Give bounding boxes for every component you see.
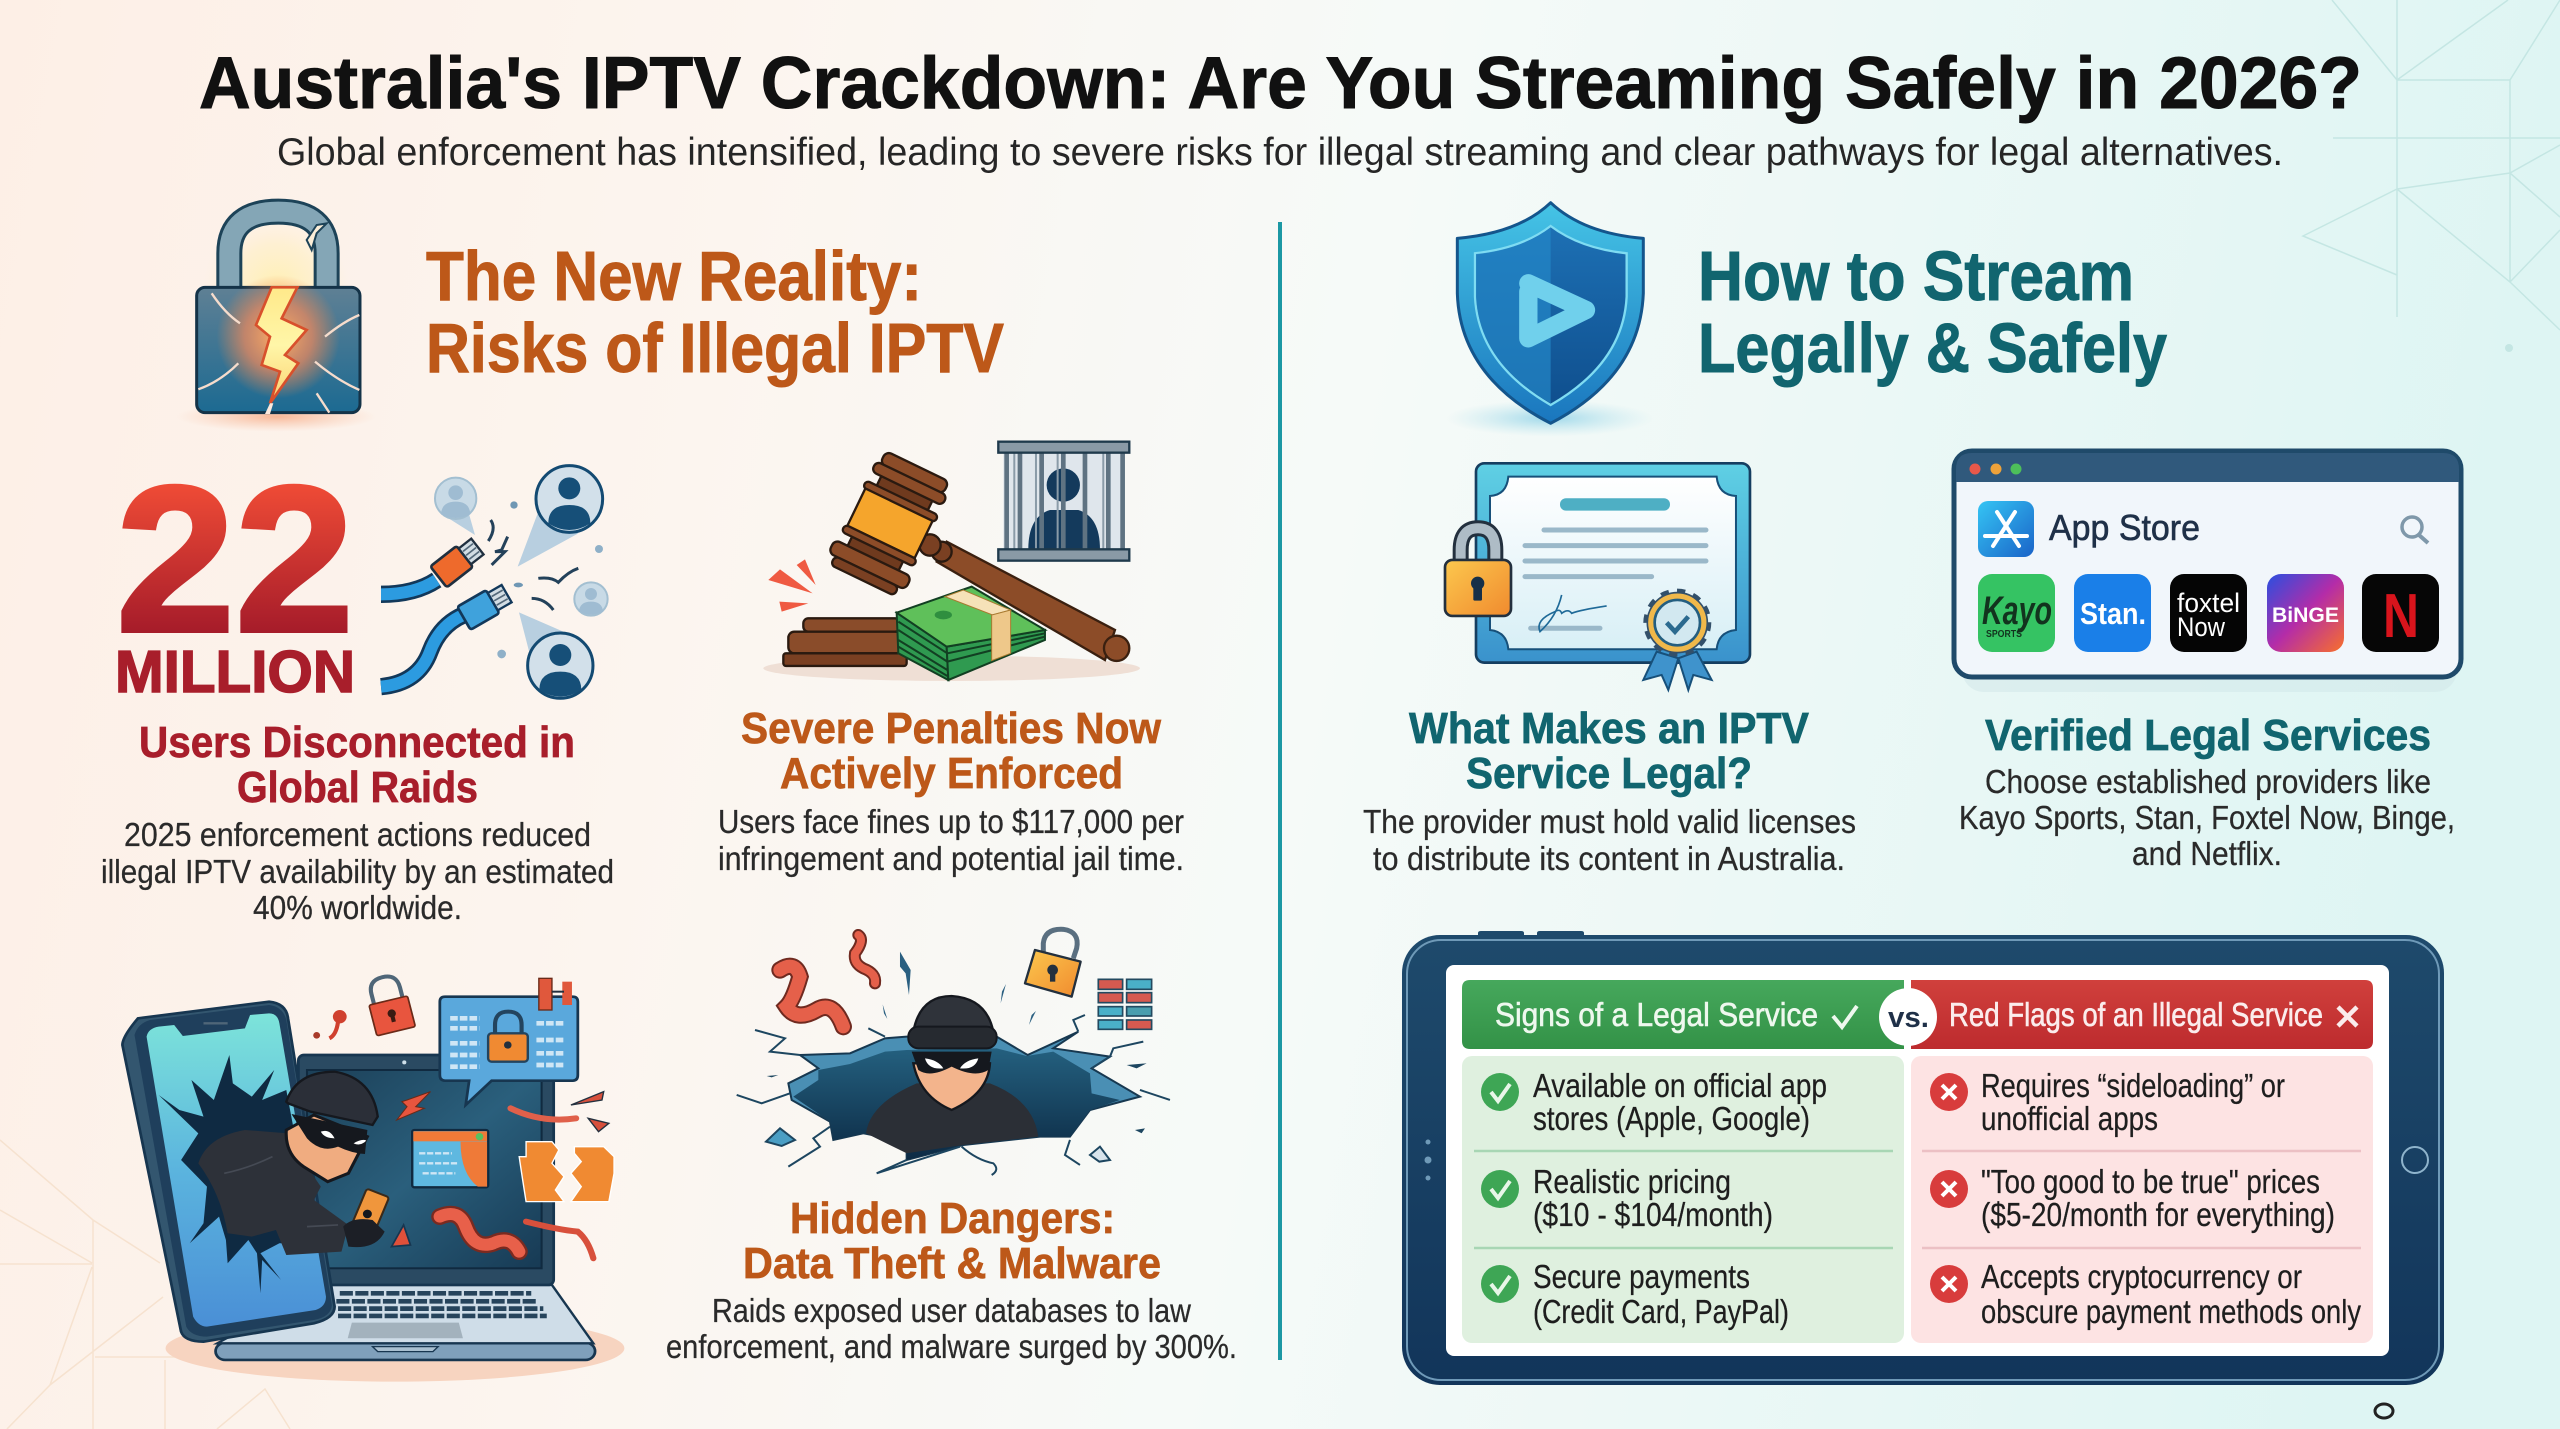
panel: legal signs: (Credit Card, PayPal) [1533, 1293, 1789, 1330]
vs badge: vs. [1888, 1002, 1929, 1034]
heading: users disconnected: Users Disconnected in [139, 718, 575, 767]
text: penalties body: infringement and potential jail time. [718, 840, 1184, 877]
panel: red flags [1911, 980, 2373, 1343]
heading: severe penalties: Actively Enforced [780, 749, 1123, 798]
icon: cut cables and users [381, 466, 608, 698]
text: verified body: Kayo Sports, Stan, Foxtel Now, Binge, [1959, 799, 2455, 836]
text: dangers body: Raids exposed user databases to law [712, 1292, 1191, 1329]
text: disconnected body: 2025 enforcement actions reduced [124, 816, 591, 853]
panel: legal signs: Signs of a Legal Service [1495, 996, 1818, 1033]
icon: app store window: Kayo [1982, 589, 2052, 633]
panel: red flags: Accepts cryptocurrency or [1981, 1258, 2302, 1295]
text: dangers body: enforcement, and malware surged by 300%. [666, 1328, 1237, 1365]
icon: play shield [1447, 203, 1653, 437]
heading: users disconnected: Global Raids [237, 763, 478, 812]
heading: how to stream: How to Stream [1698, 237, 2134, 315]
heading: new reality [426, 237, 1004, 387]
comparison tablet [1402, 931, 2444, 1385]
icon: app store window: App Store [2049, 507, 2200, 548]
stat: 22 million: 22 [116, 444, 354, 676]
heading: users disconnected [139, 718, 575, 812]
heading: hidden dangers: Data Theft & Malware [743, 1239, 1161, 1288]
heading: what makes legal [1409, 704, 1810, 798]
heading: hidden dangers: Hidden Dangers: [790, 1194, 1115, 1243]
text: disconnected body: 40% worldwide. [253, 889, 462, 926]
icon: app store window: BiNGE [2272, 604, 2339, 627]
icon: app store window: Stan. [2080, 596, 2146, 631]
icon: app store window [1954, 451, 2461, 692]
text: disconnected body: illegal IPTV availability by an estimated [101, 853, 614, 890]
stat: 22 million: MILLION [115, 639, 355, 705]
icon: app store window: foxtel [2177, 588, 2240, 618]
panel: legal signs: Available on official app [1533, 1067, 1827, 1104]
panel: right legal streaming [1363, 203, 2461, 1385]
panel: legal signs: Secure payments [1533, 1258, 1750, 1295]
panel: red flags: unofficial apps [1981, 1100, 2158, 1137]
icon: hacker breaking out of phone into laptop [122, 973, 624, 1382]
icon: app store window: Now [2177, 612, 2225, 642]
text: verified body: and Netflix. [2132, 835, 2282, 872]
heading: what makes legal: What Makes an IPTV [1409, 704, 1810, 753]
icon: app store window: N [2383, 582, 2419, 651]
heading: verified services: Verified Legal Services [1985, 711, 2431, 760]
panel: red flags: obscure payment methods only [1981, 1293, 2361, 1330]
center divider [1278, 222, 1282, 1360]
panel: legal signs: ($10 - $104/month) [1533, 1196, 1773, 1233]
panel: red flags: Requires “sideloading” or [1981, 1067, 2285, 1104]
text: disconnected body [101, 816, 614, 926]
heading: how to stream [1698, 237, 2167, 387]
text: legal body [1363, 803, 1856, 877]
heading: severe penalties [741, 704, 1162, 798]
text: verified body: Choose established providers like [1985, 763, 2431, 800]
heading: what makes legal: Service Legal? [1466, 749, 1752, 798]
text: dangers body [666, 1292, 1237, 1365]
heading: severe penalties: Severe Penalties Now [741, 704, 1162, 753]
icon: app store window: SPORTS [1986, 629, 2022, 640]
panel: red flags: Red Flags of an Illegal Service [1949, 996, 2323, 1033]
title: Australia's IPTV Crackdown: Are You Streaming Safely in 2026? [199, 43, 2362, 124]
text: verified body [1959, 763, 2455, 872]
panel: legal signs: Realistic pricing [1533, 1163, 1731, 1200]
icon: gavel, money and jail [763, 442, 1140, 681]
subtitle: Global enforcement has intensified, leading to severe risks for illegal streaming and clear pathways for legal alternatives. [277, 131, 2283, 174]
text: legal body: to distribute its content in Australia. [1373, 840, 1845, 877]
text: penalties body [718, 803, 1184, 877]
panel: red flags: ($5-20/month for everything) [1981, 1196, 2335, 1233]
heading: new reality: Risks of Illegal IPTV [426, 309, 1004, 387]
vs badge [1879, 988, 1937, 1046]
panel: red flags: "Too good to be true" prices [1981, 1163, 2320, 1200]
text: penalties body: Users face fines up to $117,000 per [718, 803, 1184, 840]
heading: how to stream: Legally & Safely [1698, 309, 2167, 387]
text: legal body: The provider must hold valid licenses [1363, 803, 1856, 840]
icon: licence certificate [1445, 463, 1750, 690]
panel: left risks [101, 212, 1237, 1382]
panel: legal signs [1462, 980, 1904, 1343]
heading: new reality: The New Reality: [426, 237, 922, 315]
corner ring mark [2375, 1404, 2393, 1418]
icon: hacker emerging from cracked hole [737, 929, 1170, 1175]
icon: broken padlock [177, 212, 377, 432]
heading: hidden dangers [743, 1194, 1161, 1288]
panel: legal signs: stores (Apple, Google) [1533, 1100, 1810, 1137]
